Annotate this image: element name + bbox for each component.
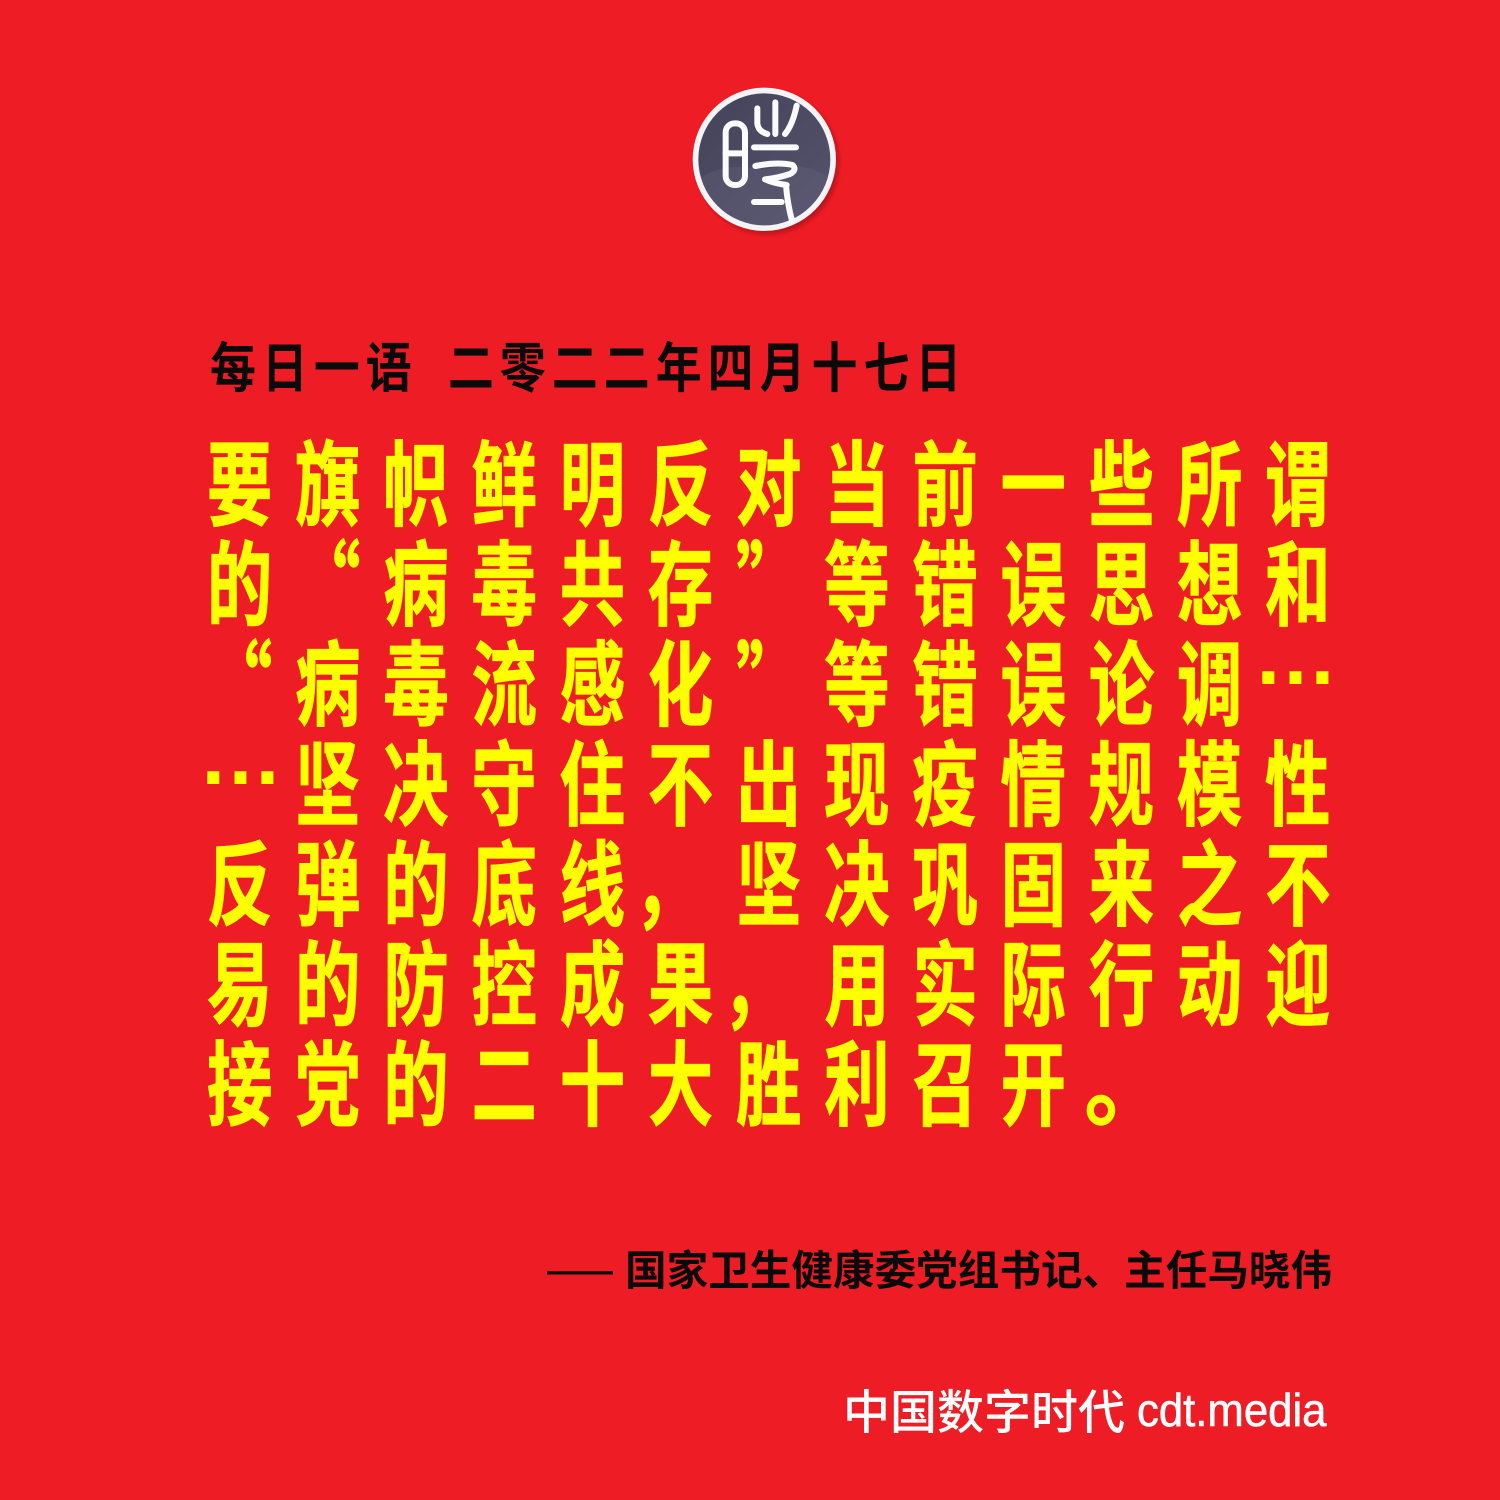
quote line 3: “病毒流感化”等错误论调	[207, 612, 1265, 745]
quote line 1: 要旗帜鲜明反对当前一些所谓	[207, 412, 1353, 545]
brand url: cdt.media	[1137, 1384, 1326, 1436]
date heading	[210, 324, 967, 403]
quote line 7: 接党的二十大胜利召开	[207, 1012, 1089, 1145]
footer brand	[843, 1374, 1327, 1443]
attribution	[547, 1237, 1332, 1297]
quote line 2: 的“病毒共存”等错误思想和	[207, 512, 1353, 645]
quote line 4: 坚决守住不出现疫情规模性	[295, 712, 1353, 845]
icon: round seal logo	[692, 88, 841, 236]
attribution name: 国家卫生健康委党组书记、主任马晓伟	[625, 1237, 1332, 1297]
ellipsis, line 4 start: …	[198, 708, 283, 803]
quote line 6: 易的防控成果，用实际行动迎	[207, 912, 1353, 1045]
ellipsis, line 3 end: …	[1253, 608, 1338, 703]
main quote	[198, 412, 1353, 1145]
quote line 5: 反弹的底线，坚决巩固来之不	[207, 812, 1353, 945]
quote line 7: 。	[1085, 1012, 1199, 1145]
date: 二零二二年四月十七日	[448, 324, 967, 403]
heading label: 每日一语	[210, 324, 418, 403]
attribution dash: ——	[547, 1252, 613, 1289]
brand name: 中国数字时代	[843, 1374, 1125, 1443]
